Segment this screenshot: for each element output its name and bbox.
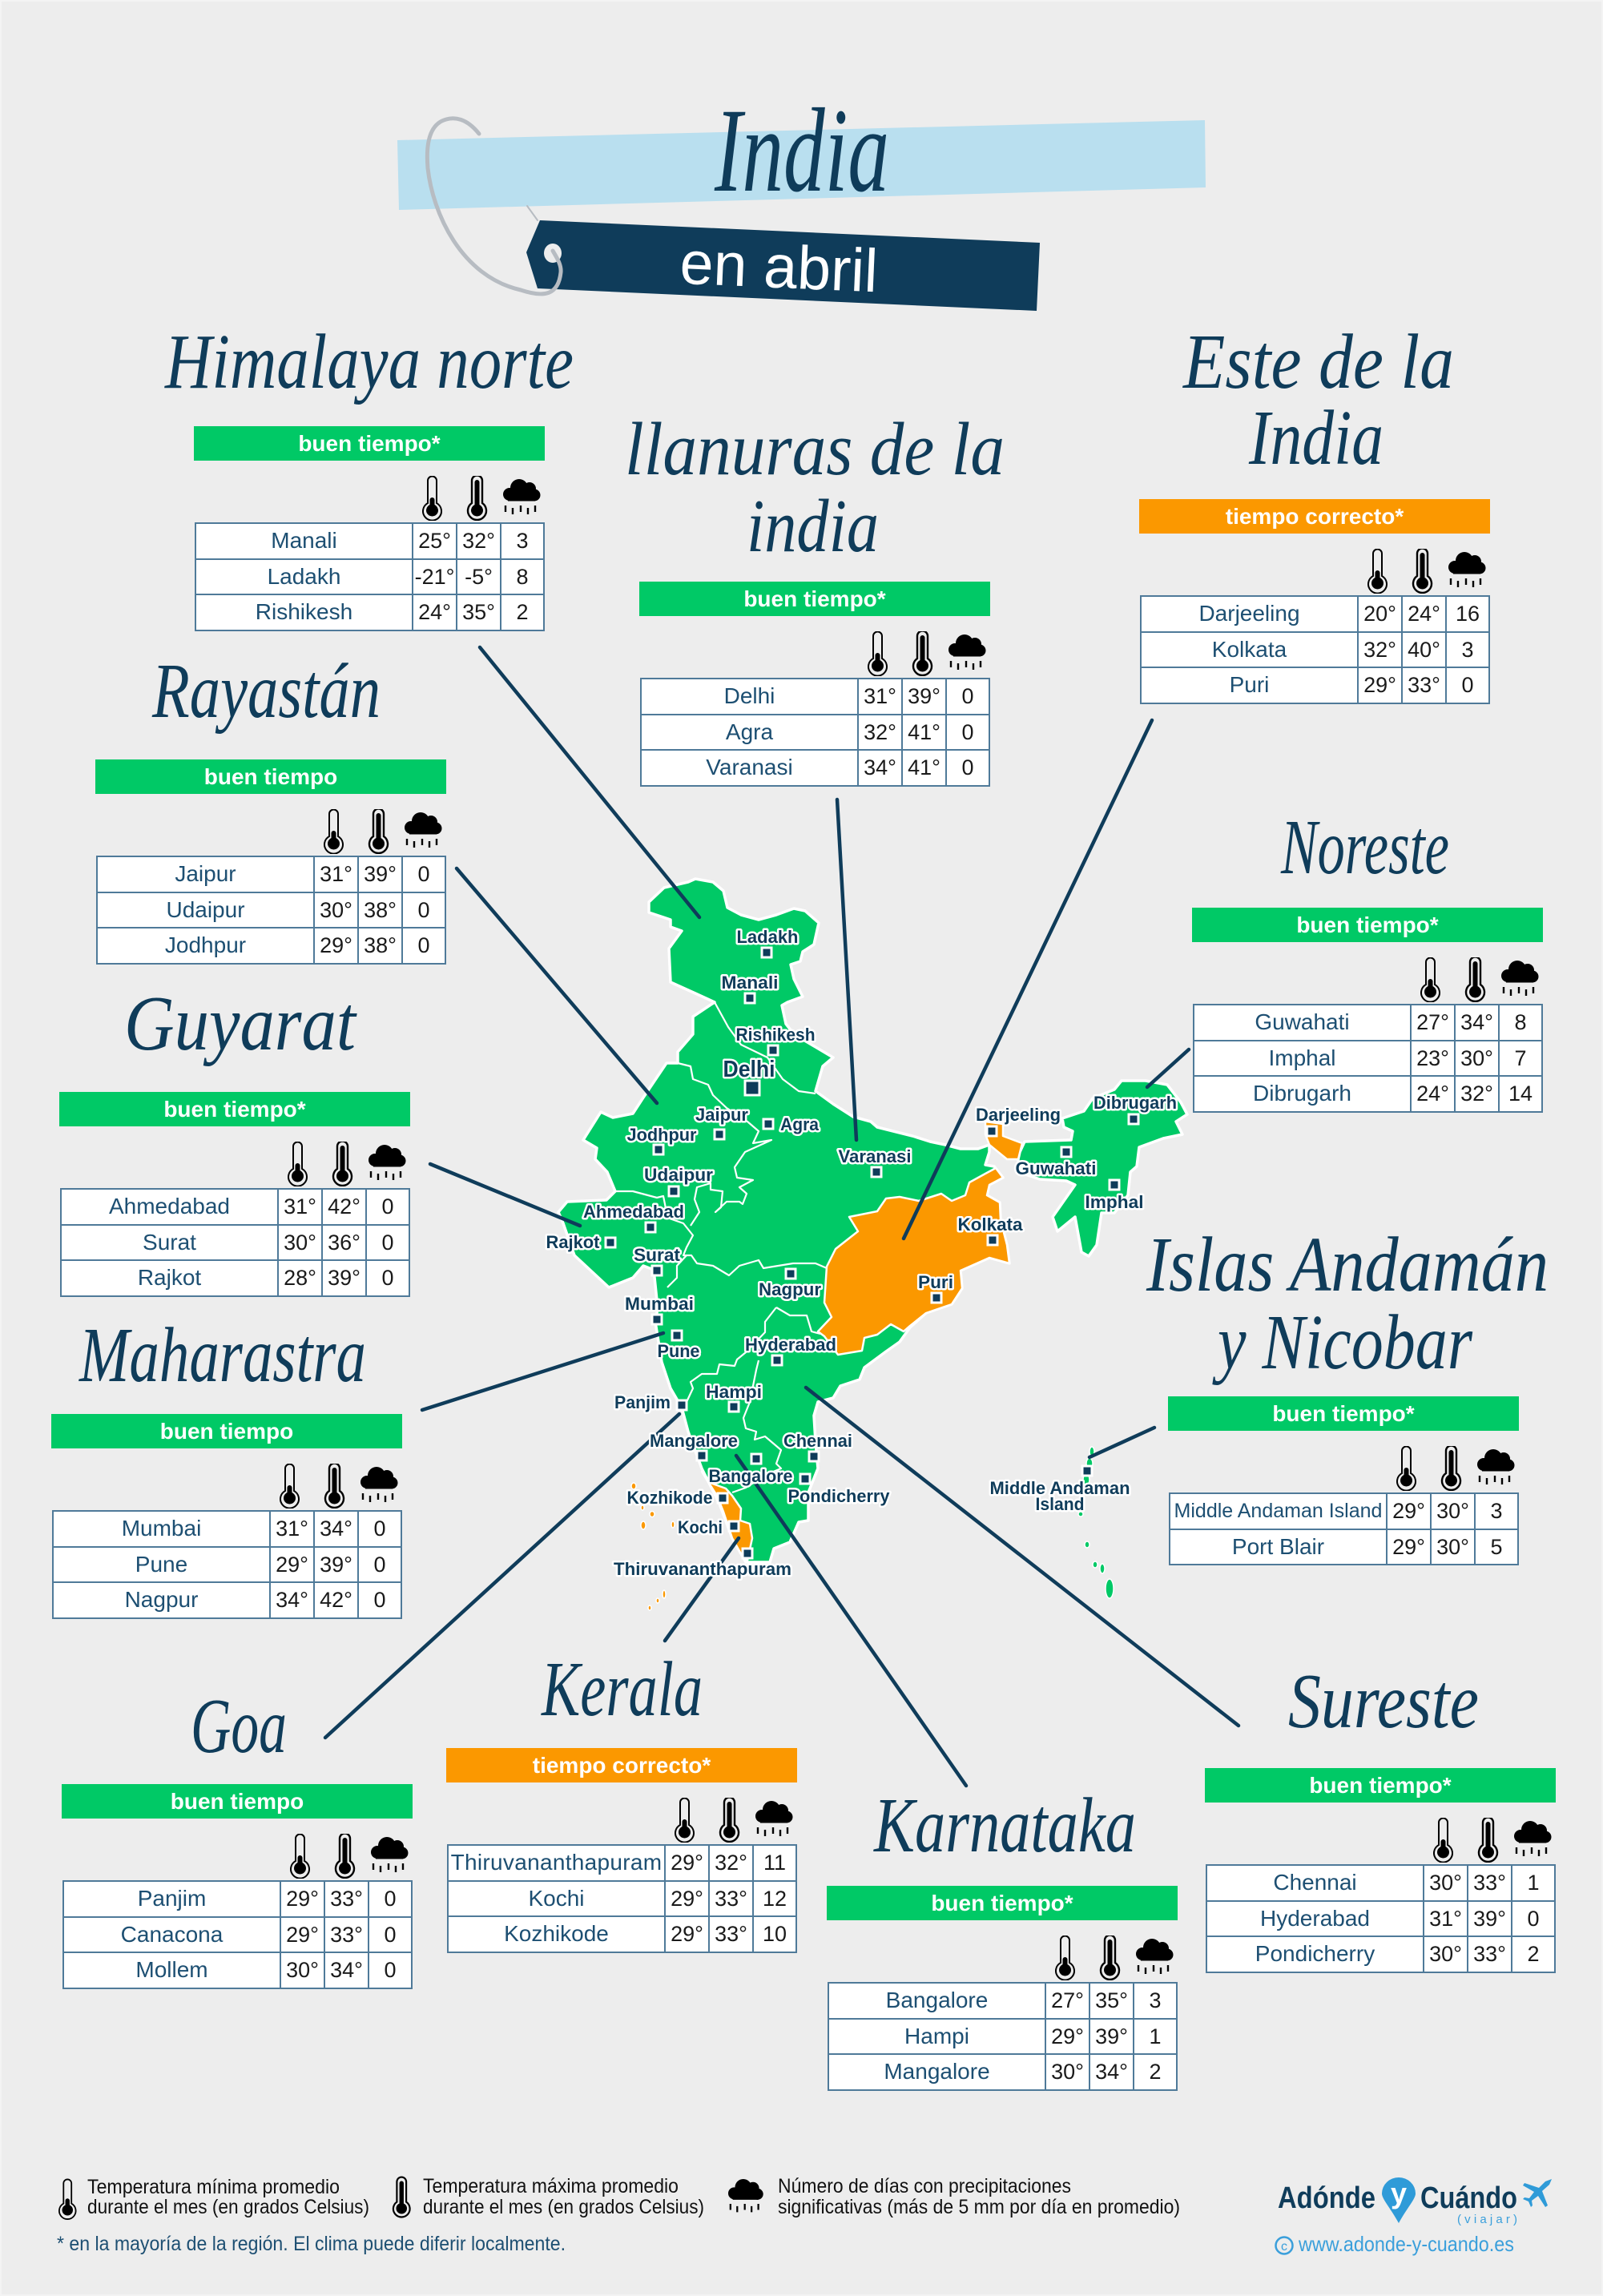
table: 0 — [961, 755, 974, 779]
table: Delhi — [724, 683, 775, 708]
table: 32° — [864, 720, 896, 744]
table: Udaipur — [166, 897, 245, 922]
leader line: Maharastra — [422, 1333, 663, 1410]
status bar: buen tiempo — [204, 764, 337, 789]
table: 34° — [1095, 2060, 1128, 2084]
map: Lakshadweep and southern islets — [631, 1483, 675, 1610]
table: 33° — [1408, 673, 1440, 697]
table: Imphal — [1268, 1045, 1336, 1070]
table: 39° — [908, 684, 940, 708]
table: 3 — [516, 529, 529, 553]
city labels: Imphal — [1085, 1192, 1144, 1212]
table: 27° — [1051, 1988, 1084, 2012]
table: 2 — [1527, 1942, 1540, 1966]
status bar: buen tiempo* — [163, 1097, 306, 1122]
weather icons — [868, 631, 985, 676]
subtitle: en abril — [679, 229, 880, 305]
legend: rain days — [728, 2175, 1180, 2218]
table: Mollem — [135, 1957, 208, 1982]
table: 0 — [384, 1887, 397, 1911]
table: 29° — [1392, 1535, 1425, 1559]
table: 34° — [864, 755, 896, 779]
leader line: Andaman — [1089, 1428, 1154, 1457]
table: Ladakh — [268, 564, 340, 589]
table: 23° — [1416, 1046, 1449, 1070]
region title: Islas Andamán y Nicobar: y Nicobar — [1212, 1299, 1473, 1386]
table: 41° — [908, 755, 940, 779]
leader line: Himalaya norte — [480, 647, 699, 917]
table — [640, 678, 990, 787]
weather icons — [324, 809, 442, 854]
legend: maximum temperature: Temperatura máxima promedio — [423, 2175, 679, 2197]
table: 3 — [1461, 638, 1474, 662]
table: Hyderabad — [1260, 1906, 1370, 1931]
leader line: Goa — [325, 1414, 679, 1738]
status bar: tiempo correcto* — [533, 1753, 711, 1778]
status bar: buen tiempo — [171, 1789, 304, 1814]
table: 32° — [1460, 1082, 1493, 1106]
table: 3 — [1490, 1499, 1503, 1523]
table: 31° — [1429, 1907, 1462, 1931]
logo: Adónde y Cuándo: Adónde — [1278, 2181, 1375, 2215]
city labels: Guwahati — [1016, 1158, 1096, 1178]
table: 29° — [320, 933, 352, 957]
status bar: buen tiempo — [160, 1419, 293, 1444]
map: orange region Darjeeling — [985, 1122, 1022, 1159]
table: 0 — [373, 1517, 386, 1541]
table: -5° — [465, 565, 493, 589]
panel: Rayastán — [95, 759, 446, 965]
footnote: * en la mayoría de la región. El clima puede diferir localmente. — [57, 2233, 566, 2255]
city labels: Dibrugarh — [1094, 1093, 1177, 1113]
table: 10 — [763, 1922, 787, 1946]
table: 30° — [1429, 1871, 1462, 1895]
table: 36° — [328, 1231, 360, 1255]
city labels: Middle Andaman — [990, 1478, 1130, 1498]
table: Dibrugarh — [1253, 1081, 1351, 1106]
logo: Adónde y Cuándo: Cuándo — [1420, 2181, 1517, 2215]
table: 35° — [462, 600, 495, 624]
table: 33° — [330, 1887, 363, 1911]
table: 31° — [284, 1194, 316, 1218]
city labels: Manali — [721, 973, 779, 993]
table: 41° — [908, 720, 940, 744]
copyright and website: www.adonde-y-cuando.es — [1298, 2232, 1514, 2256]
table: 30° — [320, 898, 352, 922]
region title: Goa: Goa — [191, 1683, 287, 1770]
table: Chennai — [1273, 1870, 1357, 1895]
leader line: llanuras — [837, 800, 856, 1140]
table: 40° — [1408, 638, 1440, 662]
table: 29° — [671, 1887, 703, 1911]
table: Mumbai — [122, 1516, 201, 1541]
table: 31° — [276, 1517, 308, 1541]
table: 2 — [516, 600, 529, 624]
status bar — [1139, 499, 1490, 534]
weather icons — [1420, 957, 1538, 1002]
table: 0 — [381, 1231, 394, 1255]
status bar — [446, 1748, 797, 1782]
copyright and website: c — [1281, 2240, 1287, 2254]
panel: Islas Andamán y Nicobar — [1168, 1396, 1519, 1565]
table: 0 — [417, 862, 430, 886]
table: Mangalore — [884, 2059, 990, 2084]
table — [96, 856, 446, 965]
table: Pune — [135, 1552, 187, 1577]
city labels: Pune — [657, 1341, 700, 1361]
table: 30° — [1429, 1942, 1462, 1966]
table: 1 — [1149, 2024, 1162, 2048]
map: northeast — [1018, 1081, 1187, 1256]
table: 34° — [276, 1588, 308, 1612]
legend: maximum temperature: durante el mes (en grados Celsius) — [423, 2196, 704, 2218]
status bar — [639, 582, 990, 616]
panel: Este de la India — [1139, 499, 1490, 704]
weather icons — [1055, 1935, 1173, 1980]
table: 42° — [320, 1588, 352, 1612]
header: light blue ribbon — [397, 120, 1206, 210]
table: 25° — [418, 529, 451, 553]
table: 28° — [284, 1266, 316, 1290]
table: 16 — [1456, 602, 1480, 626]
table: 42° — [328, 1194, 360, 1218]
table: 39° — [1095, 2024, 1128, 2048]
status bar: buen tiempo* — [1296, 912, 1439, 937]
region title: Este de la India: Este de la — [1182, 319, 1454, 405]
table: Agra — [726, 719, 773, 744]
table: 0 — [1461, 673, 1474, 697]
table: 38° — [364, 933, 397, 957]
region title: llanuras de la india — [625, 408, 1005, 568]
weather icons — [280, 1464, 397, 1509]
table: Kozhikode — [504, 1921, 609, 1946]
legend: rain days: Número de días con precipitaciones — [778, 2175, 1071, 2197]
table: 3 — [1149, 1988, 1162, 2012]
status bar — [194, 426, 545, 461]
table: 39° — [364, 862, 397, 886]
table — [828, 1982, 1178, 2091]
table: 30° — [1460, 1046, 1493, 1070]
table: Thiruvananthapuram — [451, 1850, 662, 1875]
city labels: Ahmedabad — [583, 1202, 684, 1222]
region title: Kerala: Kerala — [541, 1646, 703, 1733]
table — [447, 1844, 797, 1953]
table — [1206, 1864, 1556, 1972]
main title: India — [714, 84, 889, 217]
status bar: buen tiempo* — [298, 431, 441, 456]
table: 8 — [1514, 1010, 1527, 1034]
table: 33° — [330, 1923, 363, 1947]
city labels: Puri — [918, 1272, 953, 1292]
region title: llanuras de la india: india — [747, 485, 879, 568]
status bar — [1168, 1396, 1519, 1431]
panel: Maharastra — [51, 1414, 402, 1619]
table: 0 — [961, 720, 974, 744]
weather icons — [1396, 1446, 1514, 1491]
table: 38° — [364, 898, 397, 922]
panel: Noreste — [1192, 908, 1543, 1113]
city labels: Darjeeling — [976, 1105, 1061, 1125]
city labels: Agra — [780, 1114, 820, 1134]
legend: maximum temperature — [393, 2175, 704, 2218]
table: 34° — [1460, 1010, 1493, 1034]
table: 12 — [763, 1887, 787, 1911]
table: Jaipur — [175, 861, 236, 886]
status bar: tiempo correcto* — [1226, 504, 1404, 529]
panel: Himalaya norte — [194, 426, 545, 631]
table: 27° — [1416, 1010, 1449, 1034]
city labels: Udaipur — [644, 1165, 713, 1185]
status bar: buen tiempo* — [931, 1891, 1073, 1915]
status bar — [51, 1414, 402, 1448]
table: 14 — [1508, 1082, 1533, 1106]
table: 33° — [715, 1922, 747, 1946]
table: 31° — [320, 862, 352, 886]
status bar: buen tiempo* — [1272, 1401, 1415, 1426]
table: Rajkot — [138, 1265, 201, 1290]
table — [1140, 595, 1490, 703]
leader line: Guyarat — [430, 1164, 580, 1226]
region title: Islas Andamán y Nicobar: Islas Andamán — [1146, 1222, 1549, 1308]
map of India — [558, 879, 1187, 1610]
tag hole — [544, 244, 562, 263]
table: 32° — [462, 529, 495, 553]
region title: llanuras de la india: llanuras de la — [625, 408, 1005, 491]
table: Ahmedabad — [109, 1194, 230, 1218]
table: Rishikesh — [256, 599, 352, 624]
status bar — [1205, 1768, 1556, 1803]
logo: Adónde y Cuándo: (viajar) — [1457, 2213, 1517, 2226]
table: Pondicherry — [1255, 1941, 1375, 1966]
city labels: Kozhikode — [626, 1488, 713, 1508]
table: 34° — [320, 1517, 352, 1541]
table: 24° — [1416, 1082, 1449, 1106]
city labels: Varanasi — [838, 1146, 912, 1166]
table: 0 — [384, 1958, 397, 1982]
table: 0 — [417, 933, 430, 957]
table: Jodhpur — [165, 932, 246, 957]
city labels — [546, 927, 1177, 1579]
legend: minimum temperature: durante el mes (en grados Celsius) — [87, 2196, 369, 2218]
city labels: Ladakh — [737, 927, 798, 947]
region title: Rayastán: Rayastán — [151, 648, 381, 735]
status bar — [827, 1886, 1178, 1920]
map: internal state borders — [615, 1002, 827, 1492]
legend: rain days: significativas (más de 5 mm por día en promedio) — [778, 2196, 1180, 2218]
region title: Sureste: Sureste — [1288, 1658, 1479, 1745]
table — [195, 522, 545, 631]
table: Kochi — [528, 1886, 585, 1911]
table: Surat — [143, 1230, 196, 1255]
weather icons — [675, 1798, 793, 1843]
leader line: Karnataka — [736, 1456, 966, 1786]
table: 0 — [381, 1266, 394, 1290]
table: 30° — [284, 1231, 316, 1255]
table: 33° — [1473, 1871, 1506, 1895]
table: 29° — [671, 1922, 703, 1946]
city labels: Hyderabad — [745, 1335, 836, 1355]
table: 24° — [418, 600, 451, 624]
table: Panjim — [138, 1886, 206, 1911]
city labels: Bangalore — [708, 1466, 793, 1486]
region title: Islas Andamán y Nicobar — [1146, 1222, 1549, 1386]
table: 29° — [671, 1851, 703, 1875]
weather icons — [1367, 549, 1485, 594]
table: 31° — [864, 684, 896, 708]
table: Darjeeling — [1198, 601, 1300, 626]
panel: Kerala — [446, 1748, 797, 1953]
status bar — [62, 1784, 413, 1819]
table — [1193, 1004, 1543, 1112]
leader line: Noreste — [1147, 1049, 1189, 1087]
region title: Maharastra: Maharastra — [78, 1312, 366, 1399]
table: Varanasi — [706, 755, 793, 779]
legend: minimum temperature: Temperatura mínima promedio — [87, 2176, 340, 2198]
table: 32° — [1363, 638, 1396, 662]
city labels: Rishikesh — [735, 1025, 816, 1045]
table: 29° — [286, 1923, 319, 1947]
region title: Guyarat: Guyarat — [124, 981, 357, 1067]
leader line: Sureste — [806, 1388, 1238, 1726]
map: Andaman and Nicobar islands — [1078, 1447, 1114, 1598]
city labels: Jaipur — [695, 1105, 748, 1125]
table: 29° — [1363, 673, 1396, 697]
table: Nagpur — [125, 1587, 198, 1612]
table — [52, 1510, 402, 1618]
status bar: buen tiempo* — [1309, 1773, 1452, 1798]
city labels: Island — [1035, 1494, 1085, 1514]
header: navy tag — [526, 220, 1040, 311]
legend: minimum temperature — [59, 2176, 369, 2219]
status bar: buen tiempo* — [743, 586, 886, 611]
table: 30° — [1051, 2060, 1084, 2084]
city labels: Delhi — [723, 1057, 775, 1082]
city labels: Kochi — [678, 1517, 723, 1537]
city labels: Thiruvananthapuram — [614, 1559, 791, 1579]
table: 0 — [373, 1553, 386, 1577]
table: 30° — [286, 1958, 319, 1982]
map: main landmass — [558, 879, 1009, 1562]
city markers — [606, 948, 1138, 1558]
table: 0 — [373, 1588, 386, 1612]
map: orange region Kerala — [702, 1472, 752, 1561]
table: 7 — [1514, 1046, 1527, 1070]
city labels: Kolkata — [958, 1214, 1023, 1235]
city labels: Jodhpur — [626, 1125, 697, 1145]
region title: Este de la India: India — [1248, 395, 1383, 481]
table: 11 — [763, 1851, 786, 1875]
table: Guwahati — [1255, 1009, 1350, 1034]
tag ring — [427, 119, 561, 294]
region title: Himalaya norte: Himalaya norte — [163, 319, 574, 405]
logo: Adónde y Cuándo — [1278, 2177, 1552, 2226]
status bar — [1192, 908, 1543, 942]
city labels: Mumbai — [625, 1294, 694, 1314]
table: 39° — [328, 1266, 360, 1290]
table: 33° — [1473, 1942, 1506, 1966]
table: 29° — [286, 1887, 319, 1911]
table: 2 — [1149, 2060, 1162, 2084]
table: 29° — [1051, 2024, 1084, 2048]
panel: Goa — [62, 1784, 413, 1989]
table: 0 — [381, 1194, 394, 1218]
weather icons — [290, 1834, 409, 1879]
table: Puri — [1230, 672, 1269, 697]
weather icons — [1433, 1818, 1551, 1863]
table: 0 — [384, 1923, 397, 1947]
city labels: Mangalore — [650, 1431, 738, 1451]
table: Canacona — [121, 1922, 223, 1947]
table: 1 — [1527, 1871, 1540, 1895]
leader line: Kerala — [665, 1538, 739, 1641]
table: Kolkata — [1212, 637, 1287, 662]
table: 29° — [1392, 1499, 1425, 1523]
region title: Karnataka: Karnataka — [872, 1782, 1136, 1869]
table: 39° — [320, 1553, 352, 1577]
panel: Sureste — [1205, 1768, 1556, 1973]
table: 34° — [330, 1958, 363, 1982]
panel: llanuras de la india — [639, 582, 990, 787]
table: Manali — [271, 528, 337, 553]
table: 30° — [1436, 1535, 1469, 1559]
table: 33° — [715, 1887, 747, 1911]
table: 0 — [1527, 1907, 1540, 1931]
weather icons — [288, 1142, 405, 1186]
table: 29° — [276, 1553, 308, 1577]
region title: Este de la India — [1182, 319, 1454, 481]
table: Hampi — [904, 2024, 969, 2048]
table: Middle Andaman Island — [1174, 1500, 1382, 1522]
city labels: Hampi — [706, 1382, 762, 1402]
table: 24° — [1408, 602, 1440, 626]
table — [62, 1880, 413, 1988]
region title: Noreste: Noreste — [1280, 804, 1449, 891]
logo: Adónde y Cuándo: y — [1391, 2177, 1407, 2209]
city labels: Panjim — [614, 1392, 671, 1412]
table: 35° — [1095, 1988, 1128, 2012]
status bar — [59, 1092, 410, 1126]
weather icons — [422, 476, 540, 521]
leader line: Rayastán — [457, 868, 657, 1103]
panel: Guyarat — [59, 1092, 410, 1297]
table: 39° — [1473, 1907, 1506, 1931]
table: 0 — [417, 898, 430, 922]
table — [60, 1188, 410, 1296]
table: 0 — [961, 684, 974, 708]
city labels: Pondicherry — [788, 1486, 890, 1506]
table: 30° — [1436, 1499, 1469, 1523]
table: Bangalore — [886, 1988, 988, 2012]
table: 8 — [516, 565, 529, 589]
city labels: Nagpur — [759, 1279, 821, 1299]
table: 20° — [1363, 602, 1396, 626]
table: Port Blair — [1232, 1534, 1324, 1559]
map: orange region east — [818, 1168, 1009, 1355]
city labels: Surat — [634, 1245, 681, 1265]
leader line: Este — [904, 720, 1152, 1239]
table: 32° — [715, 1851, 747, 1875]
panel: Karnataka — [827, 1886, 1178, 2091]
city labels: Rajkot — [546, 1232, 600, 1252]
table: 5 — [1490, 1535, 1503, 1559]
city labels: Chennai — [783, 1431, 852, 1451]
status bar — [95, 759, 446, 794]
table — [1169, 1492, 1519, 1565]
table: -21° — [415, 565, 454, 589]
